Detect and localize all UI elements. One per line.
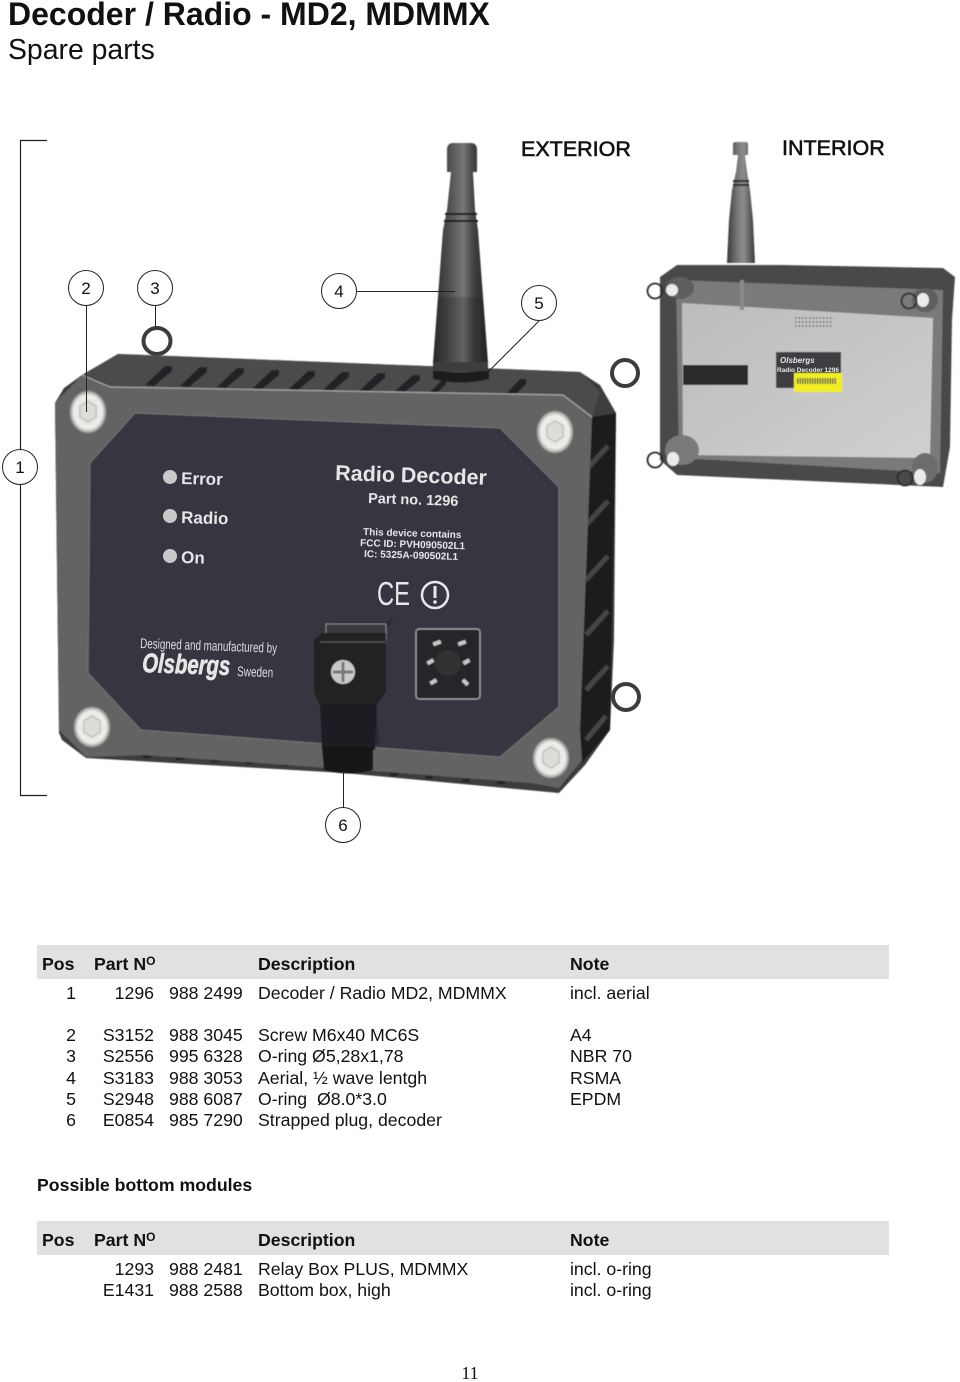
table header: Pos bbox=[42, 954, 75, 974]
antenna bbox=[727, 142, 755, 263]
connector bbox=[683, 365, 748, 385]
row 4: 988 3053 bbox=[169, 1068, 243, 1088]
row 2: 988 2588 bbox=[169, 1280, 243, 1300]
manufacturer labels bbox=[140, 635, 277, 681]
heading: exterior: EXTERIOR bbox=[521, 137, 631, 161]
callout 3 bbox=[138, 270, 172, 327]
label text on interior device: Radio Decoder 1296 bbox=[777, 367, 839, 374]
tray floor bbox=[682, 303, 933, 458]
indicator labels: Radio bbox=[181, 508, 229, 528]
row 5: S2948 bbox=[103, 1089, 154, 1109]
loose o-ring bbox=[612, 360, 638, 386]
product labels: FCC ID: PVH090502L1 bbox=[360, 538, 466, 552]
row 3 bbox=[66, 1046, 632, 1066]
indicator labels: Error bbox=[181, 469, 223, 489]
table header: O bbox=[146, 1230, 155, 1244]
screws bbox=[70, 391, 573, 778]
title bbox=[8, 0, 490, 66]
icon: CE and warning marks bbox=[377, 575, 448, 612]
row 6: E0854 bbox=[103, 1110, 154, 1130]
parts table bbox=[37, 945, 889, 1130]
row 6 bbox=[66, 1110, 442, 1130]
callout 1 bbox=[2, 450, 38, 484]
callout 2: 2 bbox=[81, 279, 91, 298]
callout 1: 1 bbox=[15, 458, 25, 477]
front frame bbox=[55, 375, 592, 788]
row 1: 1293 bbox=[115, 1259, 154, 1279]
row 4 bbox=[66, 1068, 621, 1088]
tray bbox=[676, 280, 943, 473]
table header: Pos bbox=[42, 1230, 75, 1250]
manufacturer labels: Sweden bbox=[237, 663, 273, 680]
table header: O bbox=[146, 954, 155, 968]
table header: Description bbox=[258, 1230, 355, 1250]
labels on exterior device bbox=[140, 461, 488, 681]
row 4: 4 bbox=[66, 1068, 76, 1088]
row 2 bbox=[66, 1025, 592, 1045]
table header bbox=[37, 1221, 889, 1255]
product labels: Part no. 1296 bbox=[368, 491, 459, 510]
row 2: Screw M6x40 MC6S bbox=[258, 1025, 419, 1045]
product labels: Radio Decoder bbox=[335, 461, 488, 490]
modules table bbox=[37, 1221, 889, 1300]
inner panel bbox=[88, 413, 559, 757]
icon: CE and warning marks: CE bbox=[377, 575, 410, 612]
heading: interior: INTERIOR bbox=[782, 136, 885, 160]
heading: possible bottom modules: Possible bottom modules bbox=[37, 1175, 252, 1195]
posts and o-rings bbox=[648, 277, 938, 486]
callout 4 bbox=[322, 274, 455, 308]
loose o-ring bbox=[613, 684, 639, 710]
table header: Part N bbox=[94, 954, 146, 974]
product label bbox=[776, 352, 842, 392]
antenna pin bbox=[740, 280, 744, 310]
product labels: This device contains bbox=[363, 527, 462, 541]
row 1: 988 2499 bbox=[169, 983, 243, 1003]
table header: Note bbox=[570, 1230, 609, 1250]
row 5: O-ring Ø8.0*3.0 bbox=[258, 1089, 387, 1109]
row 2: S3152 bbox=[103, 1025, 154, 1045]
table header bbox=[37, 945, 889, 979]
bracket: assembly bbox=[20, 140, 47, 796]
row 2: 2 bbox=[66, 1025, 76, 1045]
row 2: A4 bbox=[570, 1025, 592, 1045]
row 1: Decoder / Radio MD2, MDMMX bbox=[258, 983, 507, 1003]
manufacturer labels: Designed and manufactured by bbox=[140, 635, 277, 656]
row 3: 3 bbox=[66, 1046, 76, 1066]
row 6: 985 7290 bbox=[169, 1110, 243, 1130]
row 1: 1296 bbox=[115, 983, 154, 1003]
table header: Part N bbox=[94, 1230, 146, 1250]
row 2 bbox=[103, 1280, 652, 1300]
bottom and left bumps bbox=[143, 755, 505, 784]
table header: Description bbox=[258, 954, 355, 974]
device body bbox=[55, 354, 616, 793]
row 1: incl. o-ring bbox=[570, 1259, 652, 1279]
indicator labels bbox=[163, 469, 229, 568]
indicator labels: On bbox=[181, 548, 205, 568]
row 6: Strapped plug, decoder bbox=[258, 1110, 442, 1130]
strapped plug bbox=[314, 614, 396, 774]
row 1: 1 bbox=[66, 983, 76, 1003]
row 5: 988 6087 bbox=[169, 1089, 243, 1109]
row 1: 988 2481 bbox=[169, 1259, 243, 1279]
subtitle: Spare parts bbox=[8, 34, 155, 66]
row 3: S2556 bbox=[103, 1046, 154, 1066]
label text on interior device bbox=[777, 356, 839, 374]
callout 4: 4 bbox=[334, 282, 344, 301]
illustration: interior device bbox=[648, 142, 955, 487]
top fins bbox=[145, 366, 526, 396]
table header: Note bbox=[570, 954, 609, 974]
antenna bbox=[433, 143, 489, 382]
row 3: NBR 70 bbox=[570, 1046, 632, 1066]
row 4: Aerial, ½ wave lentgh bbox=[258, 1068, 427, 1088]
callout 6: 6 bbox=[338, 816, 348, 835]
row 1: incl. aerial bbox=[570, 983, 650, 1003]
row 5: EPDM bbox=[570, 1089, 621, 1109]
callout 5: 5 bbox=[534, 294, 544, 313]
row 2: 988 3045 bbox=[169, 1025, 243, 1045]
row 1 bbox=[115, 1259, 652, 1279]
row 2: Bottom box, high bbox=[258, 1280, 391, 1300]
case shell bbox=[660, 265, 955, 487]
callout 6 bbox=[326, 773, 360, 842]
row 6: 6 bbox=[66, 1110, 76, 1130]
row 4: S3183 bbox=[103, 1068, 154, 1088]
row 3: 995 6328 bbox=[169, 1046, 243, 1066]
dark side ribs bbox=[580, 413, 616, 763]
label text on interior device: Olsbergs bbox=[780, 356, 815, 365]
row 1: Relay Box PLUS, MDMMX bbox=[258, 1259, 469, 1279]
antenna rings bbox=[733, 180, 749, 186]
manufacturer labels: Olsbergs bbox=[142, 648, 231, 681]
row 1 bbox=[66, 983, 650, 1003]
row 2: E1431 bbox=[103, 1280, 154, 1300]
row 5 bbox=[66, 1089, 621, 1109]
product labels: IC: 5325A-090502L1 bbox=[364, 549, 459, 563]
illustration: exterior device bbox=[55, 143, 616, 793]
row 2: incl. o-ring bbox=[570, 1280, 652, 1300]
o-ring behind exterior, callout 3 bbox=[144, 328, 170, 354]
row 3: O-ring Ø5,28x1,78 bbox=[258, 1046, 404, 1066]
row 5: 5 bbox=[66, 1089, 76, 1109]
callout 5 bbox=[488, 286, 556, 372]
callout 2 bbox=[68, 270, 104, 412]
product labels bbox=[335, 461, 488, 563]
row 4: RSMA bbox=[570, 1068, 621, 1088]
socket bbox=[416, 629, 480, 699]
top band bbox=[82, 354, 600, 417]
callout 3: 3 bbox=[150, 279, 160, 298]
vent dots bbox=[795, 318, 833, 326]
